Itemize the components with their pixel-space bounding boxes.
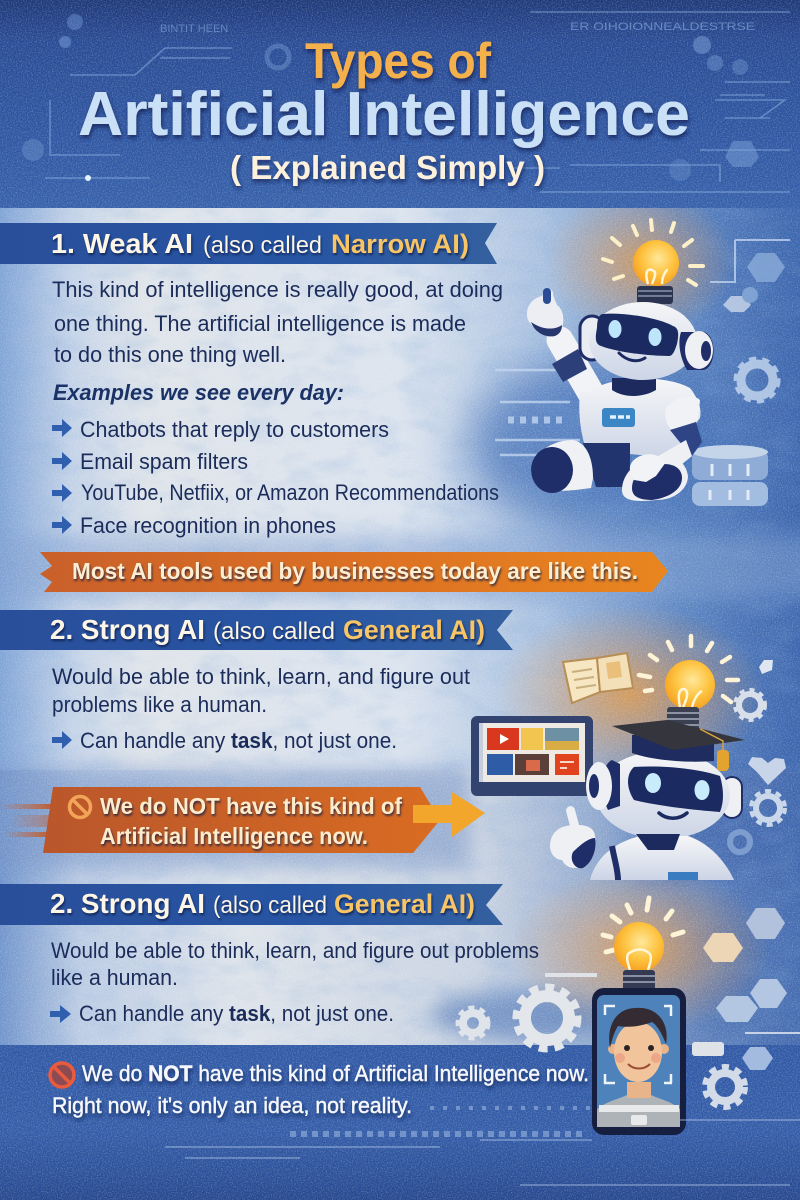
heading banner: weak AI: (also called — [203, 232, 322, 259]
head — [586, 751, 742, 839]
callout: most AI tools: Most AI tools used by businesses today are like this. — [72, 558, 638, 584]
head — [580, 302, 714, 380]
gears and hexagons — [458, 908, 800, 1107]
footer tech texture — [165, 1108, 800, 1185]
panel: weak AI — [0, 223, 503, 538]
bulb on cap — [639, 636, 738, 731]
tablet — [471, 716, 593, 796]
phone — [592, 988, 686, 1135]
icon: prohibited — [70, 796, 90, 818]
torso — [579, 378, 702, 474]
example list: Email spam filters — [80, 449, 248, 474]
examples heading: Examples we see every day: — [53, 380, 344, 405]
bullet: any task: Can handle any task, not just one. — [80, 728, 397, 753]
graduation cap — [612, 720, 745, 771]
heading banner: strong AI repeated: (also called — [213, 892, 327, 919]
illustration: graduate robot — [471, 636, 786, 880]
example list — [52, 417, 499, 538]
description text: one thing. The artificial intelligence is made — [54, 311, 466, 336]
heading banner: strong AI: (also called — [213, 618, 335, 645]
example list: Chatbots that reply to customers — [80, 417, 389, 442]
title — [78, 33, 690, 186]
example list: Face recognition in phones — [80, 513, 336, 538]
heading banner: strong AI repeated: 2. Strong AI — [50, 888, 205, 919]
torso and pointing hand — [550, 805, 734, 880]
heading banner: strong AI: General AI) — [343, 615, 485, 645]
description text: Would be able to think, learn, and figure out problems — [51, 938, 539, 963]
subtitle: Explained Simply: ( Explained Simply ) — [230, 149, 545, 186]
gears — [730, 660, 786, 852]
illustration: face recognition phone — [458, 898, 800, 1135]
arrow — [413, 792, 485, 837]
example list: YouTube, Netfiix, or Amazon Recommendations — [81, 480, 499, 505]
heading banner: strong AI repeated: General AI) — [334, 889, 475, 919]
data cylinders — [692, 445, 768, 506]
person face — [597, 1008, 680, 1127]
title: Types of: Types of — [305, 33, 491, 89]
panel: strong AI — [0, 610, 513, 853]
raised arm — [527, 288, 592, 395]
description text — [52, 664, 470, 717]
heading banner: strong AI — [0, 610, 513, 650]
heading banner: weak AI: 1. Weak AI — [51, 228, 193, 259]
panel: strong AI repeated — [0, 884, 589, 1118]
warning text: Right now, it's only an idea, not reality. — [52, 1093, 412, 1118]
title: Artificial Intelligence: Artificial Intelligence — [78, 80, 690, 149]
callout: most AI tools — [40, 552, 668, 592]
book — [563, 653, 633, 703]
circuit lines in header: ER OIHOIONNEALDESTRSE — [570, 21, 755, 33]
description text: like a human. — [51, 965, 178, 990]
circuit lines in header — [22, 12, 790, 192]
heading banner: strong AI repeated — [0, 884, 503, 925]
heading banner: weak AI: Narrow AI) — [331, 229, 469, 259]
description text: This kind of intelligence is really good, at doing — [52, 277, 503, 302]
description text — [52, 277, 503, 367]
callout: we do not have this: We do NOT have this kind of — [100, 793, 402, 819]
icon: prohibited — [50, 1063, 74, 1087]
bulb — [603, 898, 683, 990]
heading banner: weak AI — [0, 223, 497, 264]
illustration: robot with light bulb — [495, 220, 790, 506]
warning text: We do NOT have this kind of Artificial Intelligence now. — [82, 1061, 589, 1086]
warning text — [50, 1061, 589, 1118]
callout: we do not have this: Artificial Intelligence now. — [100, 823, 368, 849]
callout: we do not have this — [0, 787, 440, 853]
description text: problems like a human. — [52, 692, 267, 717]
description text — [51, 938, 539, 990]
circuit lines in header: BINTIT HEEN — [160, 23, 228, 35]
background tech shapes — [495, 240, 790, 455]
description text: Would be able to think, learn, and figure out — [52, 664, 470, 689]
bulb — [603, 220, 703, 304]
description text: to do this one thing well. — [54, 342, 286, 367]
bullet: any task: Can handle any task, not just one. — [79, 1001, 394, 1026]
heading banner: strong AI: 2. Strong AI — [50, 614, 205, 645]
legs — [531, 440, 688, 501]
